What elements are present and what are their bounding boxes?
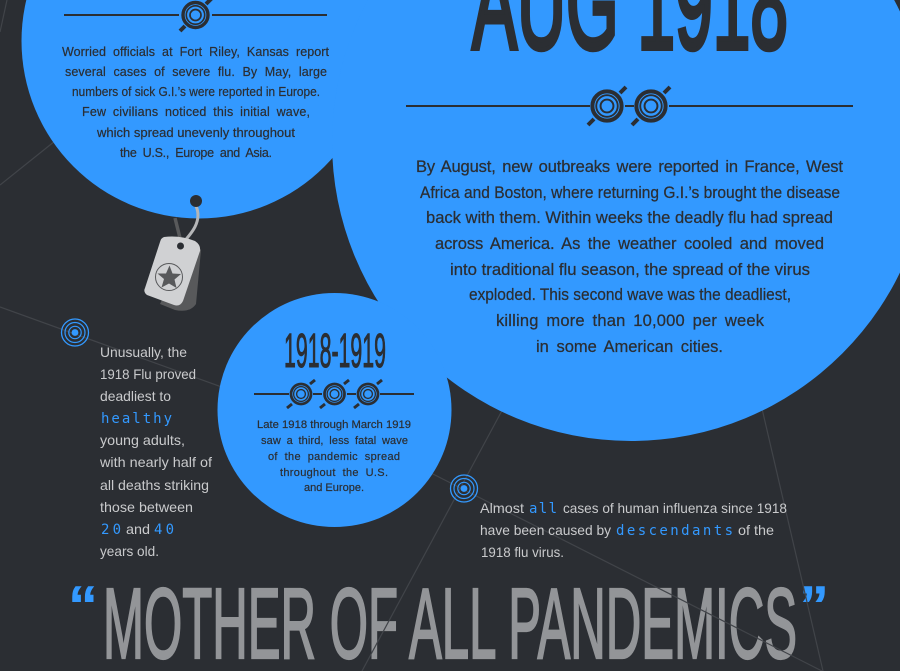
- body text: back with them. Within weeks the deadly flu had spread: [426, 209, 833, 227]
- body text: [416, 158, 843, 356]
- panel: 1918-1919: [254, 325, 414, 494]
- title quote: mother of all pandemics: “: [70, 572, 96, 646]
- callout text: and: [126, 521, 150, 537]
- panel: aug 1918: [406, 0, 853, 356]
- callout text: 20: [101, 522, 121, 538]
- body text: across America. As the weather cooled and moved: [435, 235, 824, 253]
- callout text: years old.: [100, 543, 159, 559]
- callout text: young adults,: [100, 432, 185, 448]
- body text: Worried officials at Fort Riley, Kansas report: [62, 45, 330, 59]
- callout text: all: [529, 501, 557, 517]
- callout text: 40: [154, 522, 174, 538]
- title quote: mother of all pandemics: ”: [801, 572, 827, 646]
- body text: killing more than 10,000 per week: [496, 312, 765, 330]
- callout: descendants: [450, 475, 787, 560]
- callout text: [99, 344, 212, 559]
- body text: and Europe.: [304, 482, 364, 494]
- callout text: deadliest to: [100, 388, 171, 404]
- body text: numbers of sick G.I.’s were reported in Europe.: [72, 85, 320, 99]
- callout text: Unusually, the: [100, 344, 187, 360]
- body text: Late 1918 through March 1919: [257, 419, 411, 431]
- body text: in some American cities.: [536, 338, 723, 356]
- divider with target icon: [64, 0, 327, 31]
- body text: [62, 45, 330, 160]
- callout text: with nearly half of: [99, 454, 212, 470]
- callout text: have been caused by: [480, 522, 611, 538]
- icon: dog tag: [144, 195, 202, 311]
- icon: target: [450, 475, 478, 502]
- body text: exploded. This second wave was the deadliest,: [469, 286, 791, 304]
- callout: healthy young adults: [62, 319, 212, 559]
- body text: the U.S., Europe and Asia.: [120, 146, 272, 160]
- callout text: descendants: [616, 523, 733, 539]
- body text: By August, new outbreaks were reported in France, West: [416, 158, 843, 176]
- callout text: those between: [100, 499, 193, 515]
- body text: Africa and Boston, where returning G.I.’s brought the disease: [420, 184, 840, 202]
- callout text: Almost: [480, 500, 524, 516]
- body text: Few civilians noticed this initial wave,: [82, 105, 310, 119]
- callout text: 1918 Flu proved: [100, 366, 196, 382]
- callout text: all deaths striking: [100, 477, 209, 493]
- callout text: of the: [738, 522, 774, 538]
- body text: throughout the U.S.: [280, 467, 388, 479]
- callout text: healthy: [101, 411, 172, 427]
- icon: target: [62, 319, 88, 346]
- body text: of the pandemic spread: [268, 451, 400, 463]
- body text: which spread unevenly throughout: [96, 126, 296, 140]
- body text: into traditional flu season, the spread of the virus: [450, 261, 810, 279]
- body text: saw a third, less fatal wave: [261, 435, 408, 447]
- divider with three target icons: [254, 380, 414, 408]
- body text: [257, 419, 411, 494]
- panel: spring 1918 text: [62, 0, 330, 160]
- panel: 1918-1919: 1918-1919: [284, 325, 386, 378]
- callout text: cases of human influenza since 1918: [563, 500, 787, 516]
- panel: blue speech bubbles: [22, 0, 900, 527]
- body text: several cases of severe flu. By May, large: [65, 65, 327, 79]
- callout text: [480, 500, 787, 560]
- divider with two target icons: [406, 87, 853, 125]
- callout text: 1918 flu virus.: [481, 544, 564, 560]
